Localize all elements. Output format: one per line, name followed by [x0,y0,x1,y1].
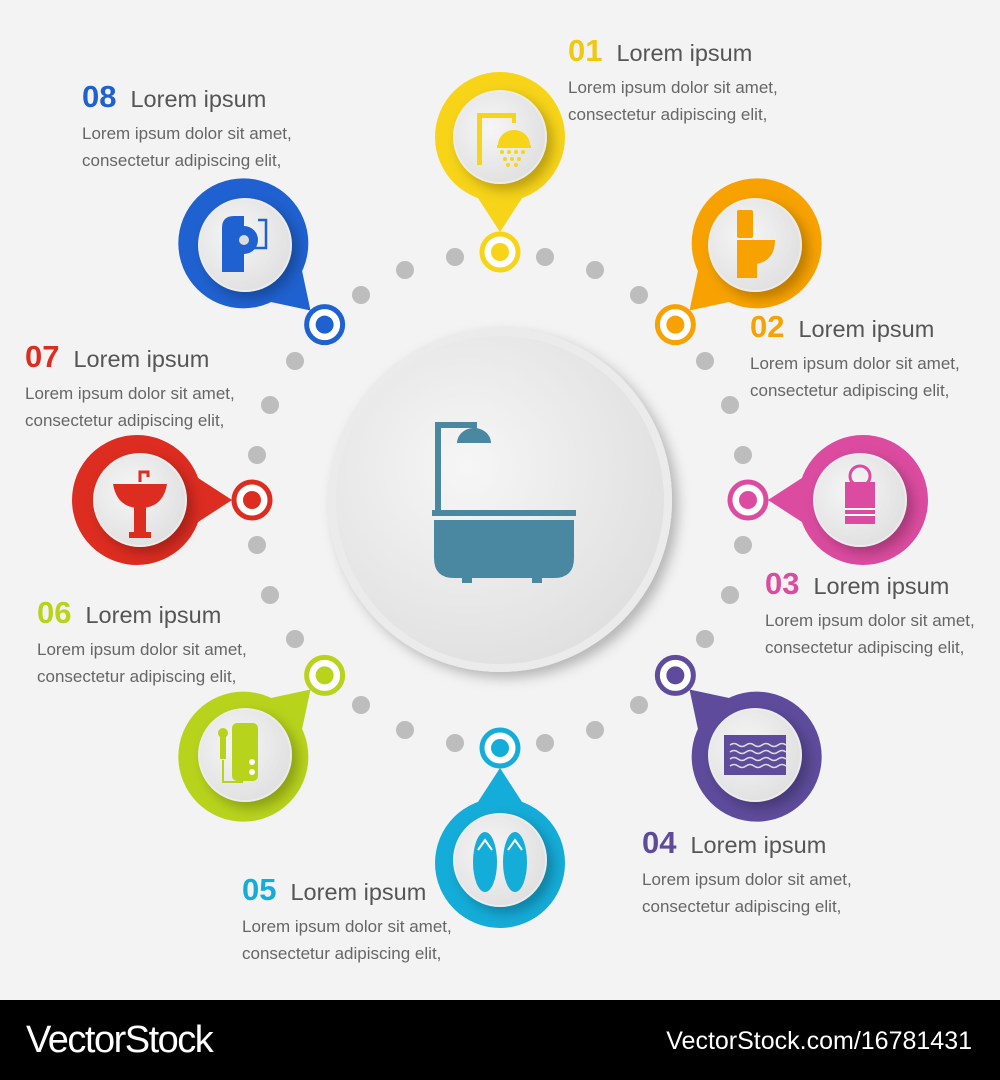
icon: flip flops [473,832,527,892]
text 06: Lorem ipsum dolor sit amet, [37,640,247,659]
text 04 [642,825,852,916]
pin 05 [435,730,565,928]
pin 01 [435,72,565,270]
pin 08 [151,151,383,383]
icon: sink [113,472,167,538]
icon: bath mat [724,735,786,775]
text 07: 07 Lorem ipsum [25,339,209,374]
text 02: Lorem ipsum dolor sit amet, [750,354,960,373]
text 04: Lorem ipsum dolor sit amet, [642,870,852,889]
text 07: consectetur adipiscing elit, [25,411,224,430]
text 06 [37,595,247,686]
gray dots ring [248,248,752,752]
text 05: consectetur adipiscing elit, [242,944,441,963]
text 05 [242,872,452,963]
text 08 [82,79,292,170]
icon: towel [845,466,875,524]
icon: bathtub [432,422,576,583]
text 01 [568,33,778,124]
text 08: consectetur adipiscing elit, [82,151,281,170]
text 06: consectetur adipiscing elit, [37,667,236,686]
text 03: 03 Lorem ipsum [765,566,949,601]
white inner discs [94,91,906,906]
pin 02 [617,151,849,383]
text 08: 08 Lorem ipsum [82,79,266,114]
icon: shower [477,113,531,167]
text 04: 04 Lorem ipsum [642,825,826,860]
pin 07 [72,435,270,565]
footer watermark bar: VectorStock.com/16781431 [666,1027,972,1055]
text 03 [765,566,975,657]
text 02 [750,309,960,400]
footer watermark bar [0,1000,1000,1080]
pin 06 [151,617,383,849]
text 05: Lorem ipsum dolor sit amet, [242,917,452,936]
text 02: consectetur adipiscing elit, [750,381,949,400]
text 07 [25,339,235,430]
icon: water heater [218,723,258,782]
pin 03 [730,435,928,565]
text 06: 06 Lorem ipsum [37,595,221,630]
text 07: Lorem ipsum dolor sit amet, [25,384,235,403]
text 08: Lorem ipsum dolor sit amet, [82,124,292,143]
center circle with bathtub [328,328,672,672]
text 03: Lorem ipsum dolor sit amet, [765,611,975,630]
pin 04 [617,617,849,849]
text 02: 02 Lorem ipsum [750,309,934,344]
text 04: consectetur adipiscing elit, [642,897,841,916]
footer watermark bar: VectorStock [26,1019,212,1061]
icon: toilet [737,210,775,278]
text 01: 01 Lorem ipsum [568,33,752,68]
text 01: consectetur adipiscing elit, [568,105,767,124]
text 05: 05 Lorem ipsum [242,872,426,907]
icon: toilet paper [222,216,266,272]
text 03: consectetur adipiscing elit, [765,638,964,657]
text 01: Lorem ipsum dolor sit amet, [568,78,778,97]
